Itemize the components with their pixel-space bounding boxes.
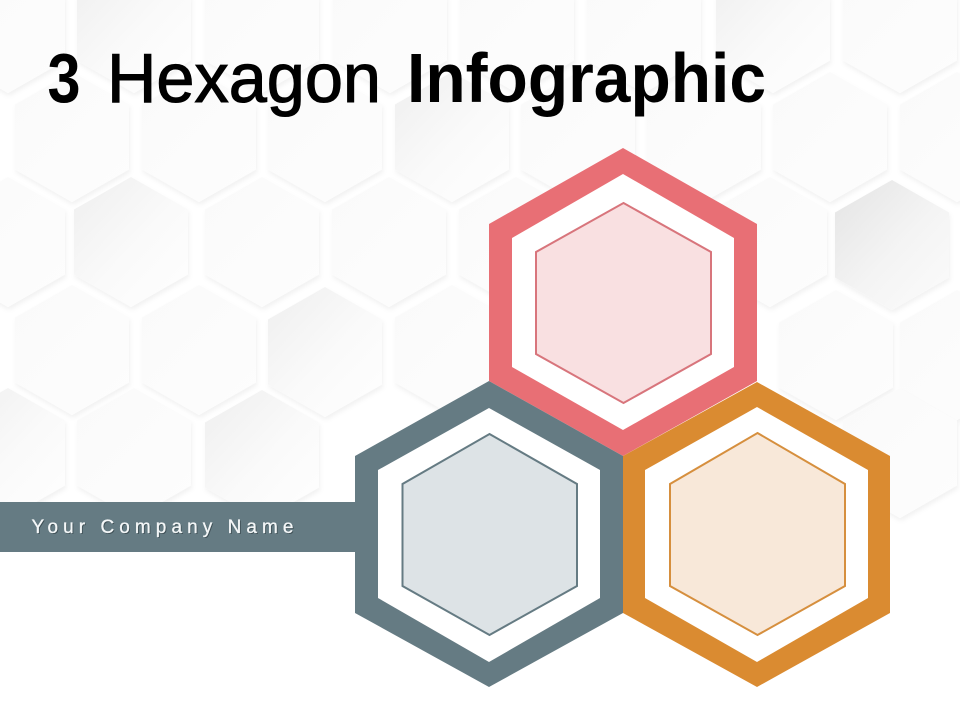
title [48, 39, 766, 117]
title: Infographic [407, 39, 766, 117]
hexagon: red [489, 148, 757, 456]
company name banner [0, 502, 356, 552]
company name banner: Your Company Name [32, 518, 294, 539]
red inner panel [536, 203, 711, 403]
company name banner: Your Company Name [32, 517, 294, 538]
title: 3 [48, 39, 80, 117]
orange inner panel [670, 433, 845, 635]
hexagon: orange [623, 382, 890, 687]
hexagon: teal [355, 381, 623, 687]
title: Hexagon [107, 39, 381, 117]
teal inner panel [402, 434, 577, 635]
background: hexagon pattern [0, 0, 960, 520]
